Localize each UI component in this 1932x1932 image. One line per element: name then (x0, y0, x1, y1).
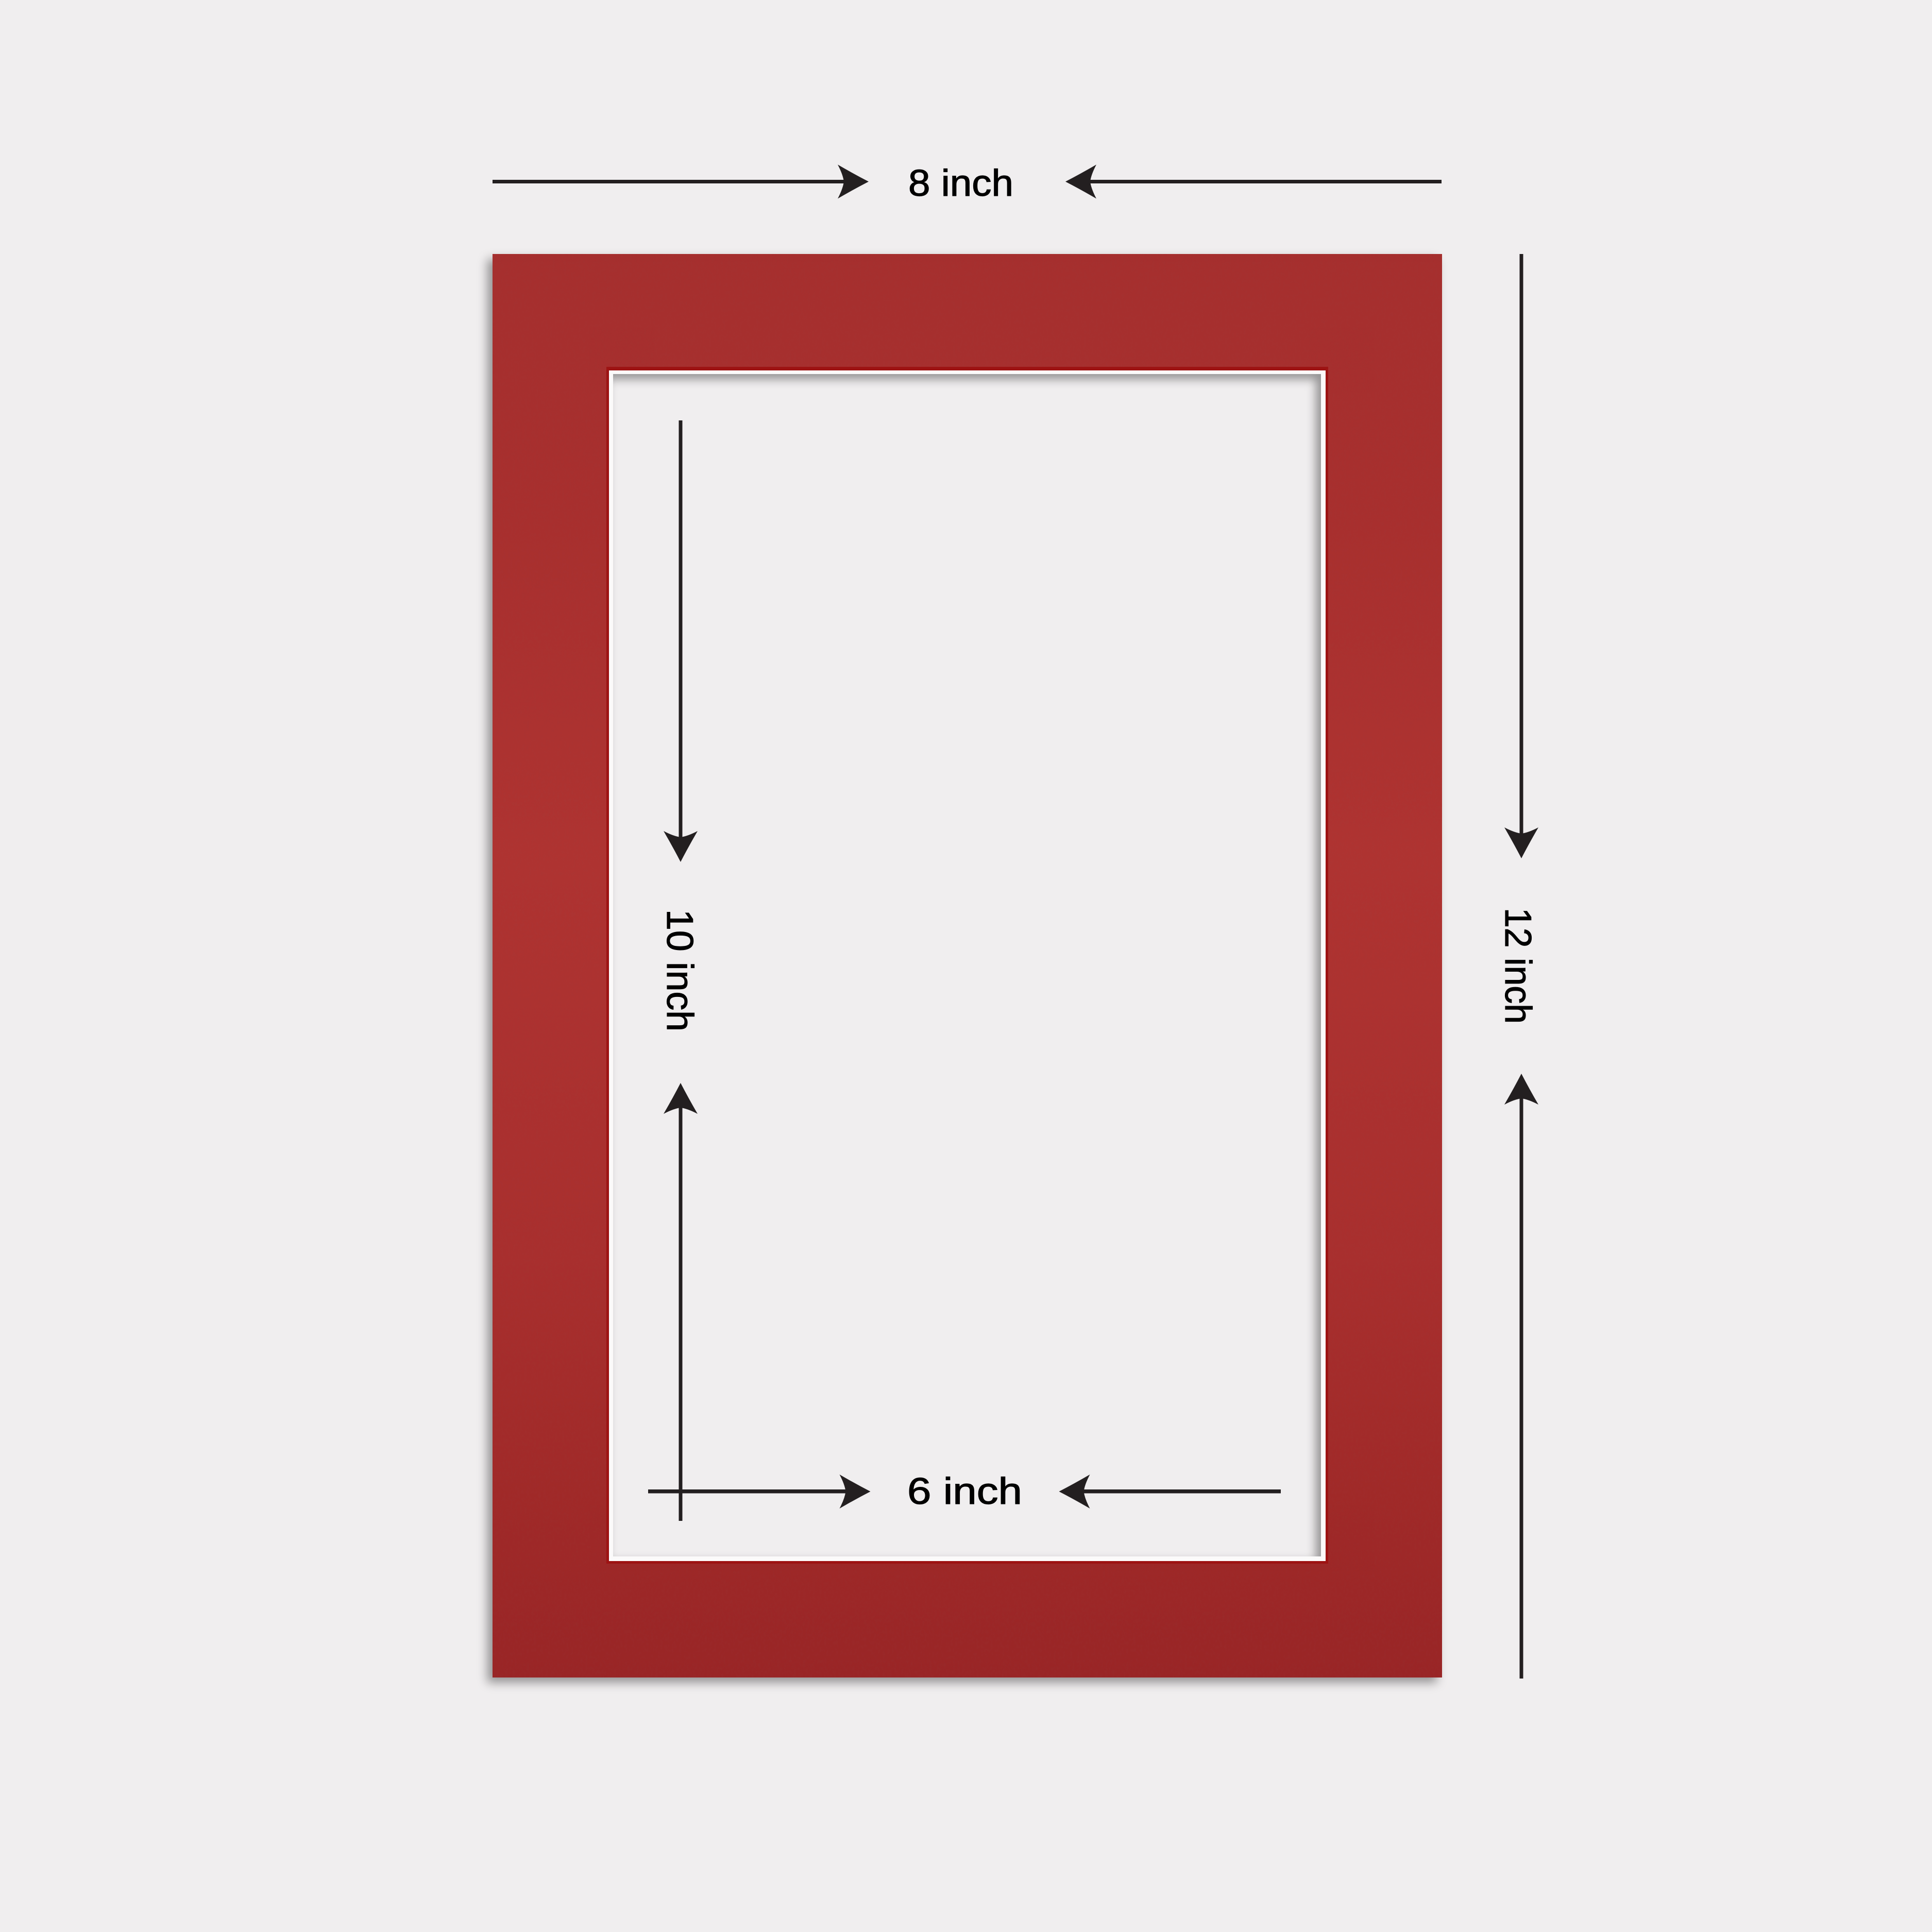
arrow: inner height from top (664, 420, 698, 862)
arrow: inner height from bottom (664, 1083, 698, 1521)
red mat surface (493, 254, 1442, 1677)
arrow: outer height from top (1504, 254, 1538, 858)
opening with inner shadow (613, 374, 1321, 1556)
arrow: inner width from right (1059, 1475, 1281, 1509)
frame drop shadow (493, 254, 1442, 1677)
label: 8 inch: 8 inch (908, 163, 1013, 204)
label: 10 inch: 10 inch (659, 909, 700, 1031)
white bevel (609, 370, 1326, 1561)
arrow: outer height from bottom (1504, 1074, 1538, 1679)
label: 12 inch: 12 inch (1497, 908, 1538, 1024)
panel: red mat board with white bevel (493, 254, 1442, 1677)
arrow: outer width from right (1065, 165, 1442, 199)
arrow: inner width from left (648, 1475, 871, 1509)
dark red cut edge (606, 367, 1328, 1564)
label: 6 inch: 6 inch (907, 1471, 1022, 1512)
arrow: outer width from left (493, 165, 869, 199)
